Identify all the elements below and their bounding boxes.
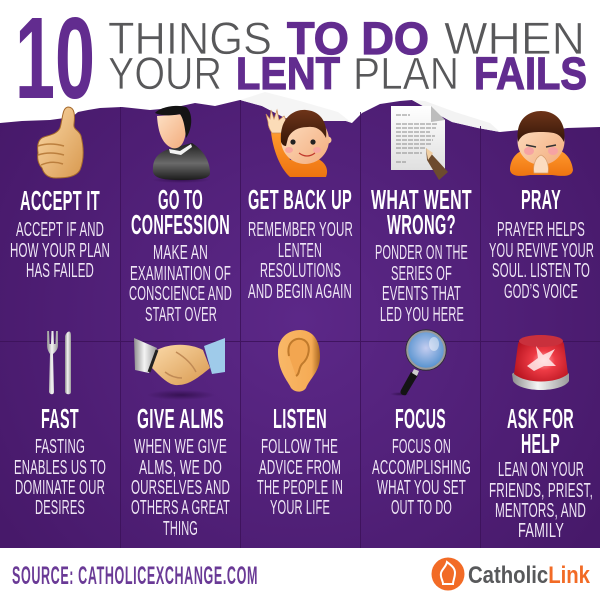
heading: PRAY — [521, 184, 561, 215]
description: OURSELVES AND — [131, 477, 230, 499]
title line 1: THINGS — [108, 13, 272, 64]
description: OUT TO DO — [391, 497, 452, 519]
description: REMEMBER YOUR — [248, 219, 353, 241]
title line 2 — [108, 48, 587, 99]
description: THE PEOPLE IN — [257, 477, 343, 499]
icon: praying boy — [510, 111, 573, 176]
description — [129, 242, 232, 326]
icon: flame badge — [432, 558, 464, 590]
description — [489, 459, 593, 542]
title line 1: WHEN — [444, 13, 585, 64]
heading: GIVE ALMS — [137, 403, 224, 434]
description: CONSCIENCE AND — [129, 283, 232, 305]
description — [248, 219, 353, 303]
heading: GO TO — [158, 184, 203, 215]
description: MAKE AN — [153, 242, 208, 264]
icon: priest — [152, 106, 210, 183]
description: HAS FAILED — [26, 260, 94, 282]
title line 2: YOUR — [108, 48, 222, 99]
title line 2: FAILS — [474, 48, 587, 99]
source line: SOURCE: CATHOLICEXCHANGE.COM — [12, 562, 258, 590]
description: ALMS, WE DO — [139, 457, 222, 479]
icon: boy raising hand — [266, 110, 332, 177]
description: FASTING — [35, 436, 85, 458]
panel: accept it — [10, 107, 110, 282]
heading: WRONG? — [387, 209, 456, 240]
title line 2: LENT — [236, 48, 340, 99]
description: ADVICE FROM — [259, 457, 341, 479]
description — [372, 436, 471, 519]
title line 1 — [108, 13, 585, 64]
description — [257, 436, 343, 519]
description: FAMILY — [518, 520, 564, 542]
description — [10, 219, 110, 282]
heading — [371, 184, 472, 240]
description: WHEN WE GIVE — [134, 436, 227, 458]
heading: CONFESSION — [131, 209, 230, 240]
description: FOLLOW THE — [261, 436, 338, 458]
wordmark: CatholicLink — [468, 562, 591, 589]
heading: WHAT WENT — [371, 184, 472, 215]
description — [131, 436, 230, 540]
icon: magnifying glass — [390, 330, 446, 396]
description — [14, 436, 106, 519]
description: EVENTS THAT — [382, 283, 461, 305]
heading: HELP — [521, 428, 560, 459]
heading: GET BACK UP — [248, 184, 352, 215]
heading: FOCUS — [395, 403, 446, 434]
panel: listen — [257, 330, 343, 519]
description: SERIES OF — [391, 263, 452, 285]
heading: LISTEN — [273, 403, 327, 434]
icon: fork and knife — [47, 331, 71, 394]
heading: FAST — [41, 403, 79, 434]
title line 2: PLAN — [353, 48, 459, 99]
description: YOUR LIFE — [270, 497, 330, 519]
icon: thumbs up — [38, 107, 83, 178]
description: WHAT YOU SET — [377, 477, 466, 499]
panel: pray — [489, 111, 594, 303]
title — [15, 0, 587, 123]
description: ACCOMPLISHING — [372, 457, 471, 479]
description: ENABLES US TO — [14, 457, 106, 479]
description — [489, 219, 594, 303]
description: EXAMINATION OF — [130, 263, 231, 285]
icon: paper and pencil — [391, 106, 448, 180]
panel: what went wrong — [371, 106, 472, 326]
title line 1: TO DO — [287, 13, 429, 64]
heading: ACCEPT IT — [20, 185, 100, 216]
description: DOMINATE OUR — [15, 477, 105, 499]
panel: ask for help — [489, 335, 593, 542]
heading — [507, 403, 574, 459]
description — [375, 242, 468, 326]
description: RESOLUTIONS — [260, 260, 341, 282]
panel: get back up — [248, 110, 353, 303]
panel: give alms — [131, 338, 230, 540]
icon: handshake — [134, 338, 225, 400]
description: OTHERS A GREAT — [131, 497, 230, 519]
panel: focus — [372, 330, 471, 519]
description: START OVER — [145, 304, 217, 326]
description: FOCUS ON — [392, 436, 451, 458]
description: DESIRES — [35, 497, 85, 519]
CatholicLink logo — [432, 558, 591, 590]
description: PONDER ON THE — [375, 242, 468, 264]
icon: ear — [278, 330, 320, 392]
purple torn-paper panel — [0, 100, 600, 548]
description: HOW YOUR PLAN — [10, 240, 110, 262]
icon: red siren — [512, 335, 569, 390]
description: AND BEGIN AGAIN — [248, 281, 352, 303]
heading — [131, 184, 230, 240]
description: ACCEPT IF AND — [16, 219, 104, 241]
description: THING — [163, 518, 198, 540]
panel: go to confession — [129, 106, 232, 326]
panel: fast — [14, 331, 106, 519]
description: LED YOU HERE — [380, 304, 464, 326]
description: LENTEN — [278, 240, 322, 262]
